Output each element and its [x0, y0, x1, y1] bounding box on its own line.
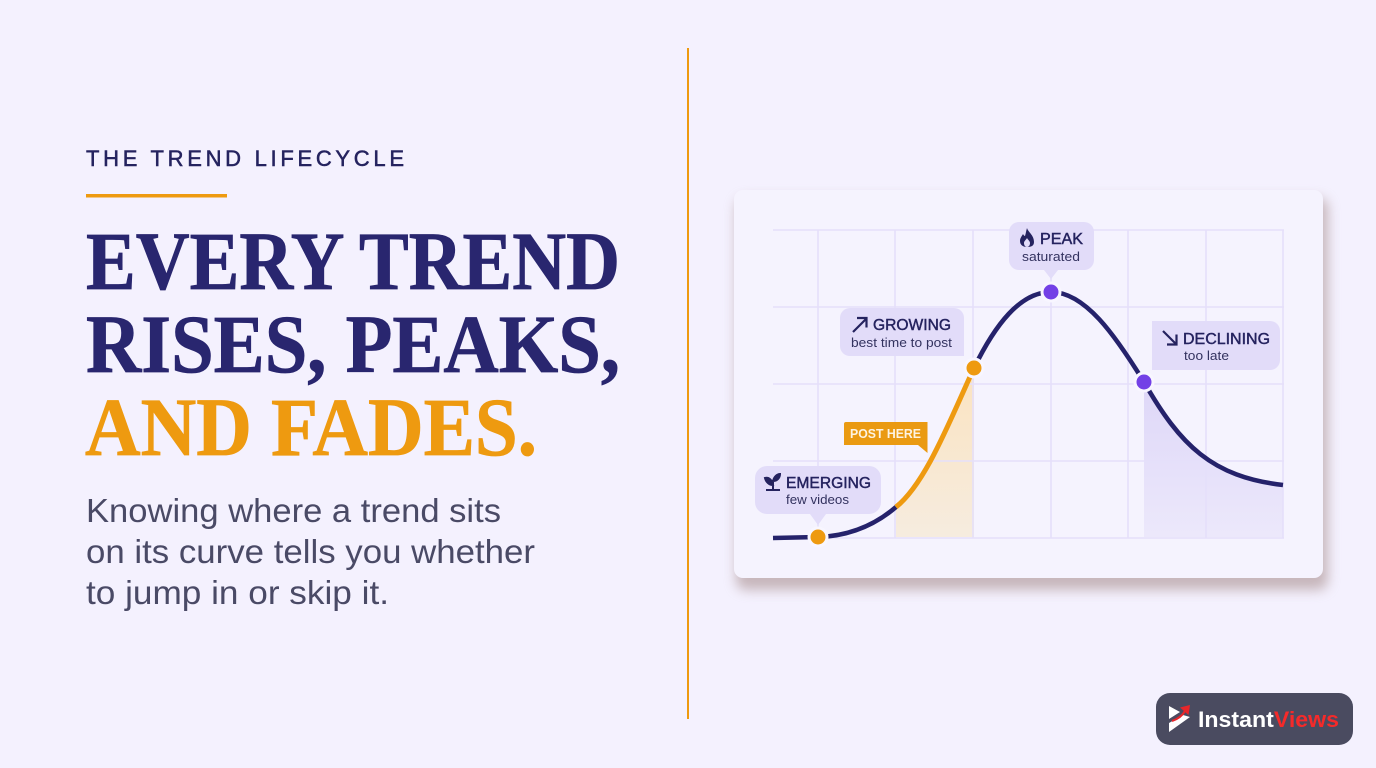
callout: declining: DECLINING — [1183, 331, 1270, 348]
icon: up arrow — [853, 318, 866, 332]
callout: growing: best time to post — [851, 335, 952, 350]
callout: growing — [840, 308, 964, 356]
callout: emerging — [755, 466, 881, 525]
shaded area: decline — [1144, 382, 1283, 537]
callout: declining — [1152, 321, 1280, 370]
callout: peak — [1009, 222, 1094, 279]
body text: to jump in or skip it. — [86, 574, 389, 611]
marker: peak — [1042, 283, 1060, 301]
vertical divider — [687, 48, 689, 719]
body text — [86, 492, 535, 611]
shaded area: post window — [896, 368, 974, 537]
panel: chart card — [734, 190, 1328, 590]
marker: emerging — [809, 528, 827, 546]
curve: navy — [773, 292, 1283, 538]
headline — [85, 215, 620, 473]
icon: logo mark — [1169, 705, 1190, 732]
logo badge: InstantViews — [1198, 707, 1339, 732]
icon: down arrow — [1163, 331, 1176, 344]
grid — [773, 230, 1284, 538]
headline: EVERY TREND — [86, 215, 620, 307]
marker: declining — [1135, 373, 1153, 391]
callout: emerging: few videos — [786, 492, 850, 507]
icon: sprout — [765, 474, 780, 490]
callout: emerging: EMERGING — [786, 475, 871, 492]
icon: flame — [1020, 228, 1034, 247]
logo badge — [1156, 693, 1353, 745]
eyebrow label: THE TREND LIFECYCLE — [86, 146, 404, 171]
marker: growing — [965, 359, 983, 377]
callout: peak: PEAK — [1040, 231, 1083, 248]
callout: growing: GROWING — [873, 317, 951, 334]
callout: post here: POST HERE — [850, 426, 921, 441]
headline: AND FADES. — [85, 381, 537, 473]
accent rule — [86, 194, 227, 198]
body text: on its curve tells you whether — [86, 533, 535, 570]
headline: RISES, PEAKS, — [86, 298, 620, 390]
callout: peak: saturated — [1022, 249, 1080, 264]
callout: declining: too late — [1184, 348, 1229, 363]
callout: post here — [844, 422, 928, 453]
body text: Knowing where a trend sits — [86, 492, 501, 529]
curve: orange segment — [896, 368, 974, 507]
